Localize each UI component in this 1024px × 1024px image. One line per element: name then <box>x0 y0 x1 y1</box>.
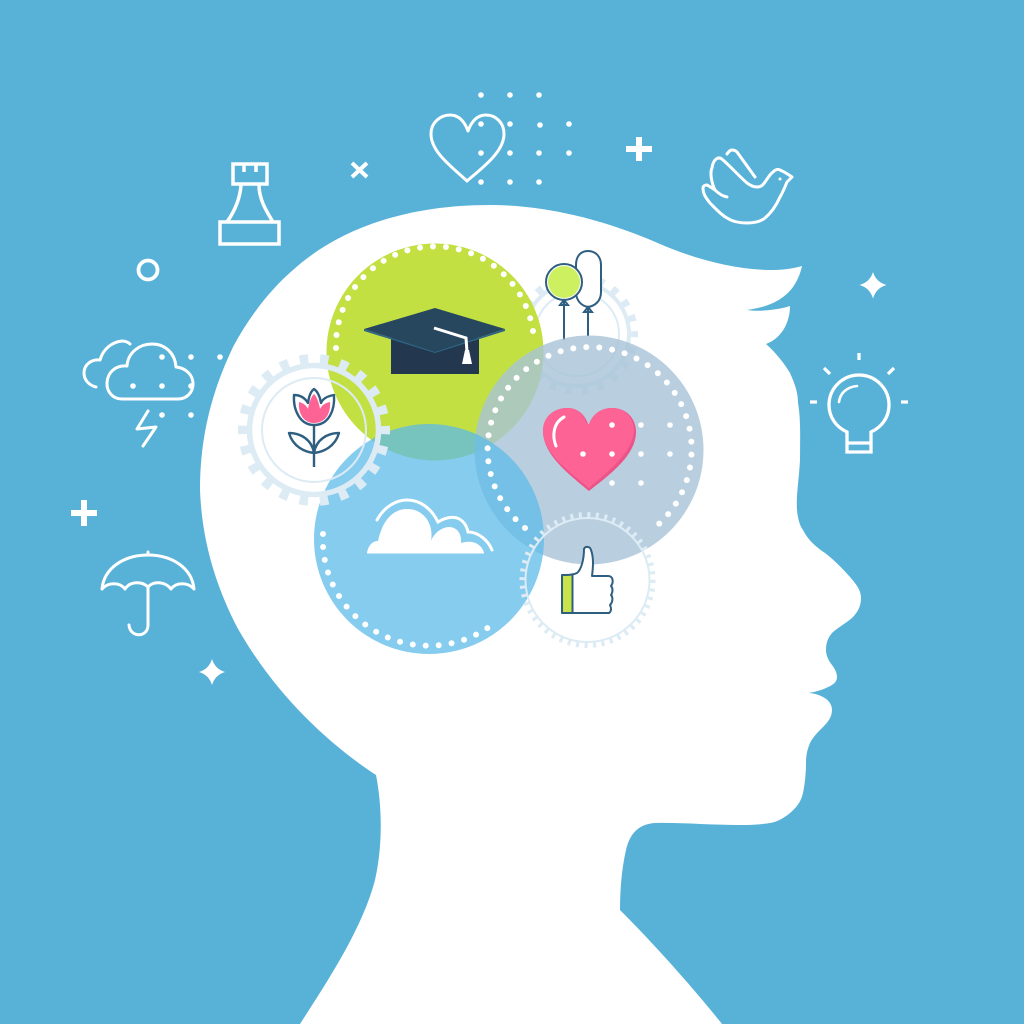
icon: tulip <box>289 389 339 467</box>
icon: cloud <box>367 500 492 554</box>
panel: grey circle <box>474 336 704 564</box>
gear: behind balloons <box>520 278 634 390</box>
icon: sparkle bottom <box>199 659 225 685</box>
icon: light bulb <box>810 353 908 452</box>
dotted ring: grey circle <box>488 347 692 529</box>
icon: plus top <box>626 137 652 161</box>
head silhouette <box>200 205 861 1024</box>
dot grid: top <box>478 92 572 185</box>
icon: thumbs up <box>562 547 613 613</box>
icon: plus left <box>71 500 97 526</box>
panel: blue circle <box>314 424 544 654</box>
icon: balloons <box>546 251 601 340</box>
icon: sparkle right <box>860 272 886 298</box>
icon: thumb gear <box>522 515 652 645</box>
icon: small circle <box>138 260 158 280</box>
icon: storm cloud <box>84 341 193 446</box>
dot grid: cloud <box>130 354 223 418</box>
panel: green circle <box>326 244 544 460</box>
icon: graduation cap <box>364 308 505 374</box>
dot grid: heart <box>580 422 673 486</box>
icon: pink heart <box>543 408 636 491</box>
icon: umbrella <box>102 552 194 635</box>
icon: rook <box>220 164 279 244</box>
icon: dove <box>703 150 792 223</box>
icon: tulip gear <box>243 359 385 501</box>
icon: cross <box>352 163 367 177</box>
icon: outline heart <box>431 115 504 181</box>
